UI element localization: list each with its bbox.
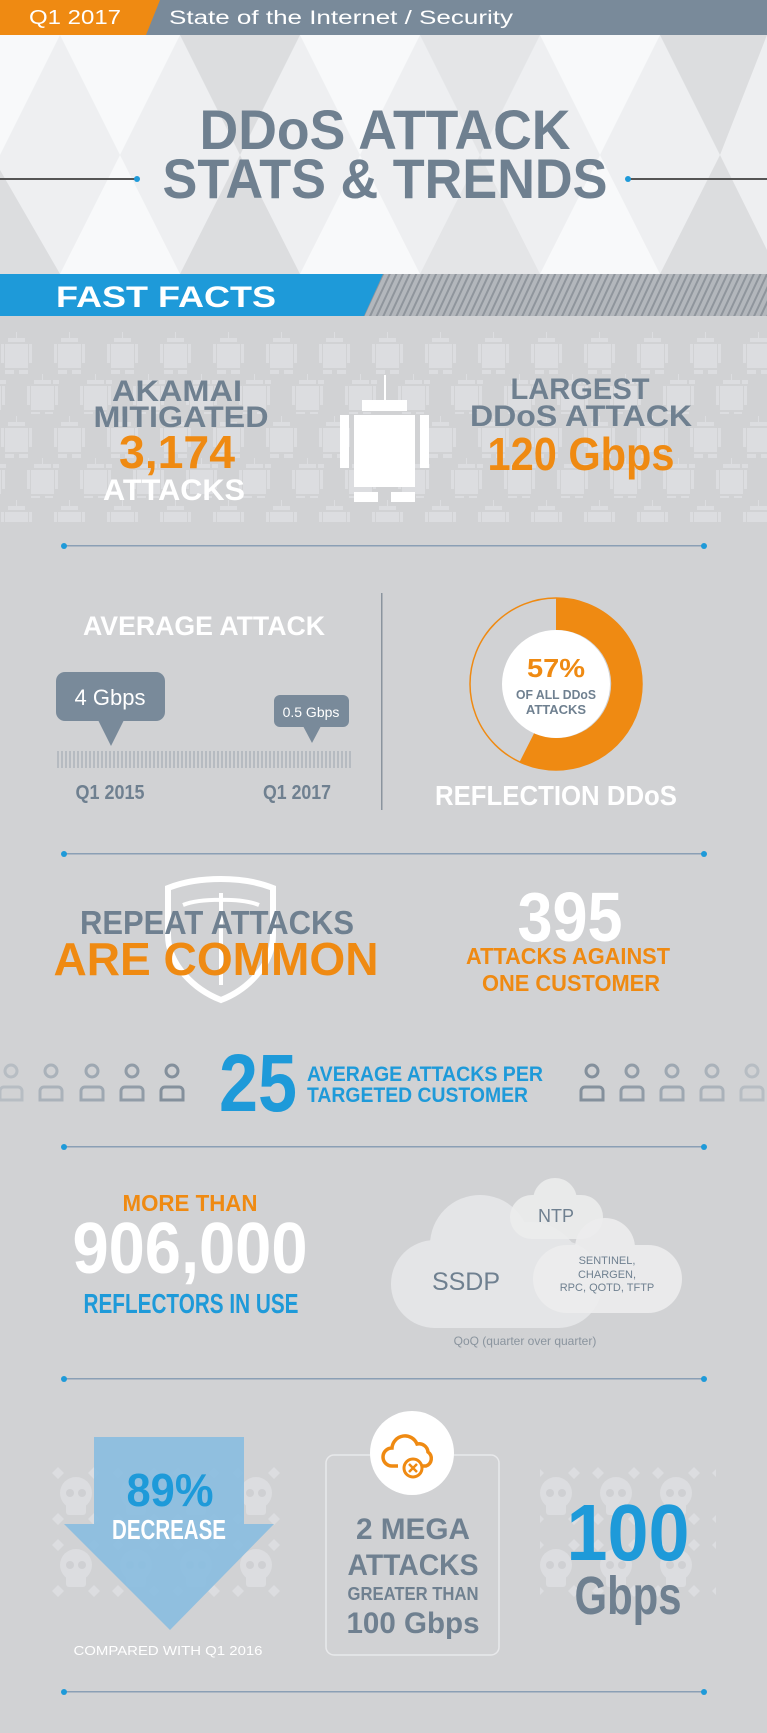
panel: average attack (56, 611, 350, 804)
cloud: reflection sources: SENTINEL, (579, 1255, 635, 1267)
stat: 100 Gbps (566, 1488, 690, 1626)
stat: 395: ONE CUSTOMER (482, 970, 660, 996)
arrow: 89% decrease: 89% (126, 1464, 214, 1516)
arrow: 89% decrease: COMPARED WITH Q1 2016 (74, 1643, 262, 1658)
cloud: reflection sources: RPC, QOTD, TFTP (560, 1282, 654, 1294)
panel: 2 mega attacks (326, 1411, 499, 1655)
stat: largest ddos attack: 120 Gbps (488, 428, 674, 480)
arrow: 89% decrease: DECREASE (112, 1514, 226, 1545)
panel: 2 mega attacks: GREATER THAN (348, 1584, 478, 1604)
callout: 0.5 Gbps (274, 695, 349, 743)
callout: 0.5 Gbps: 0.5 Gbps (283, 704, 339, 720)
stat: akamai mitigated: AKAMAI (112, 375, 242, 408)
donut chart: reflection ddos: ATTACKS (526, 702, 586, 717)
stat: 906,000 reflectors: 906,000 (72, 1209, 308, 1289)
panel: 2 mega attacks: 2 MEGA (356, 1513, 470, 1546)
stat: 395 (466, 878, 670, 996)
stat: 100 Gbps: Gbps (574, 1566, 682, 1626)
title: STATS & TRENDS (162, 147, 608, 210)
stat: akamai mitigated: ATTACKS (103, 474, 245, 507)
fast facts band (0, 274, 767, 316)
stat: 25 average attacks: 25 (219, 1038, 297, 1129)
callout: 4 Gbps (56, 672, 165, 746)
icons: people left (0, 1065, 183, 1100)
icon: cloud x (370, 1411, 454, 1495)
stat: largest ddos attack: LARGEST (510, 373, 650, 406)
stat: akamai mitigated: 3,174 (119, 426, 235, 478)
stat: 906,000 reflectors: MORE THAN (122, 1190, 258, 1216)
title (0, 98, 767, 210)
fast facts band: FAST FACTS (56, 281, 276, 314)
skull pattern left (46, 1463, 286, 1608)
top bar: Q1 2017 (29, 7, 121, 29)
cloud: reflection sources: QoQ (quarter over quarter) (454, 1334, 596, 1348)
donut chart: reflection ddos: OF ALL DDoS (516, 687, 596, 702)
panel: average attack: AVERAGE ATTACK (83, 611, 325, 641)
icon: shield (168, 879, 273, 1000)
title: DDoS ATTACK (200, 98, 570, 161)
skull pattern right (540, 1463, 716, 1608)
arrow: 89% decrease (64, 1437, 274, 1658)
panel: average attack: Q1 2017 (263, 782, 331, 804)
stat: akamai mitigated: MITIGATED (94, 401, 268, 434)
stat: 25 average attacks (219, 1038, 543, 1129)
robot pattern background (0, 330, 767, 522)
timeline ticks (58, 751, 350, 768)
stat: largest ddos attack (470, 373, 692, 480)
top bar: State of the Internet / Security (169, 8, 514, 29)
stat: akamai mitigated (94, 375, 268, 507)
panel: 2 mega attacks: ATTACKS (348, 1549, 478, 1582)
cloud: reflection sources: CHARGEN, (578, 1269, 636, 1281)
stat: largest ddos attack: DDoS ATTACK (470, 400, 692, 433)
text: repeat attacks are common: ARE COMMON (54, 933, 378, 985)
panel: 2 mega attacks: 100 Gbps (346, 1607, 480, 1640)
stat: 395: ATTACKS AGAINST (466, 943, 670, 969)
header triangle pattern (0, 35, 767, 274)
stat: 25 average attacks: AVERAGE ATTACKS PER (307, 1063, 543, 1086)
cloud: reflection sources: SSDP (432, 1268, 500, 1296)
donut chart: reflection ddos: REFLECTION DDoS (435, 780, 677, 811)
cloud: reflection sources (391, 1178, 682, 1348)
donut chart: reflection ddos (435, 598, 677, 811)
text: repeat attacks are common (54, 904, 378, 985)
stat: 395: 395 (518, 878, 622, 956)
cloud: reflection sources: NTP (538, 1206, 574, 1226)
panel: average attack: Q1 2015 (76, 782, 144, 804)
text: repeat attacks are common: REPEAT ATTACKS (80, 904, 354, 941)
donut chart: reflection ddos: 57% (527, 653, 585, 683)
stat: 100 Gbps: 100 (566, 1488, 690, 1577)
icon: robot (340, 375, 429, 502)
stat: 906,000 reflectors (72, 1190, 308, 1319)
icons: people right (581, 1065, 763, 1100)
stat: 906,000 reflectors: REFLECTORS IN USE (84, 1288, 298, 1319)
stat: 25 average attacks: TARGETED CUSTOMER (307, 1084, 528, 1107)
top bar (0, 0, 767, 35)
callout: 4 Gbps: 4 Gbps (75, 685, 145, 710)
